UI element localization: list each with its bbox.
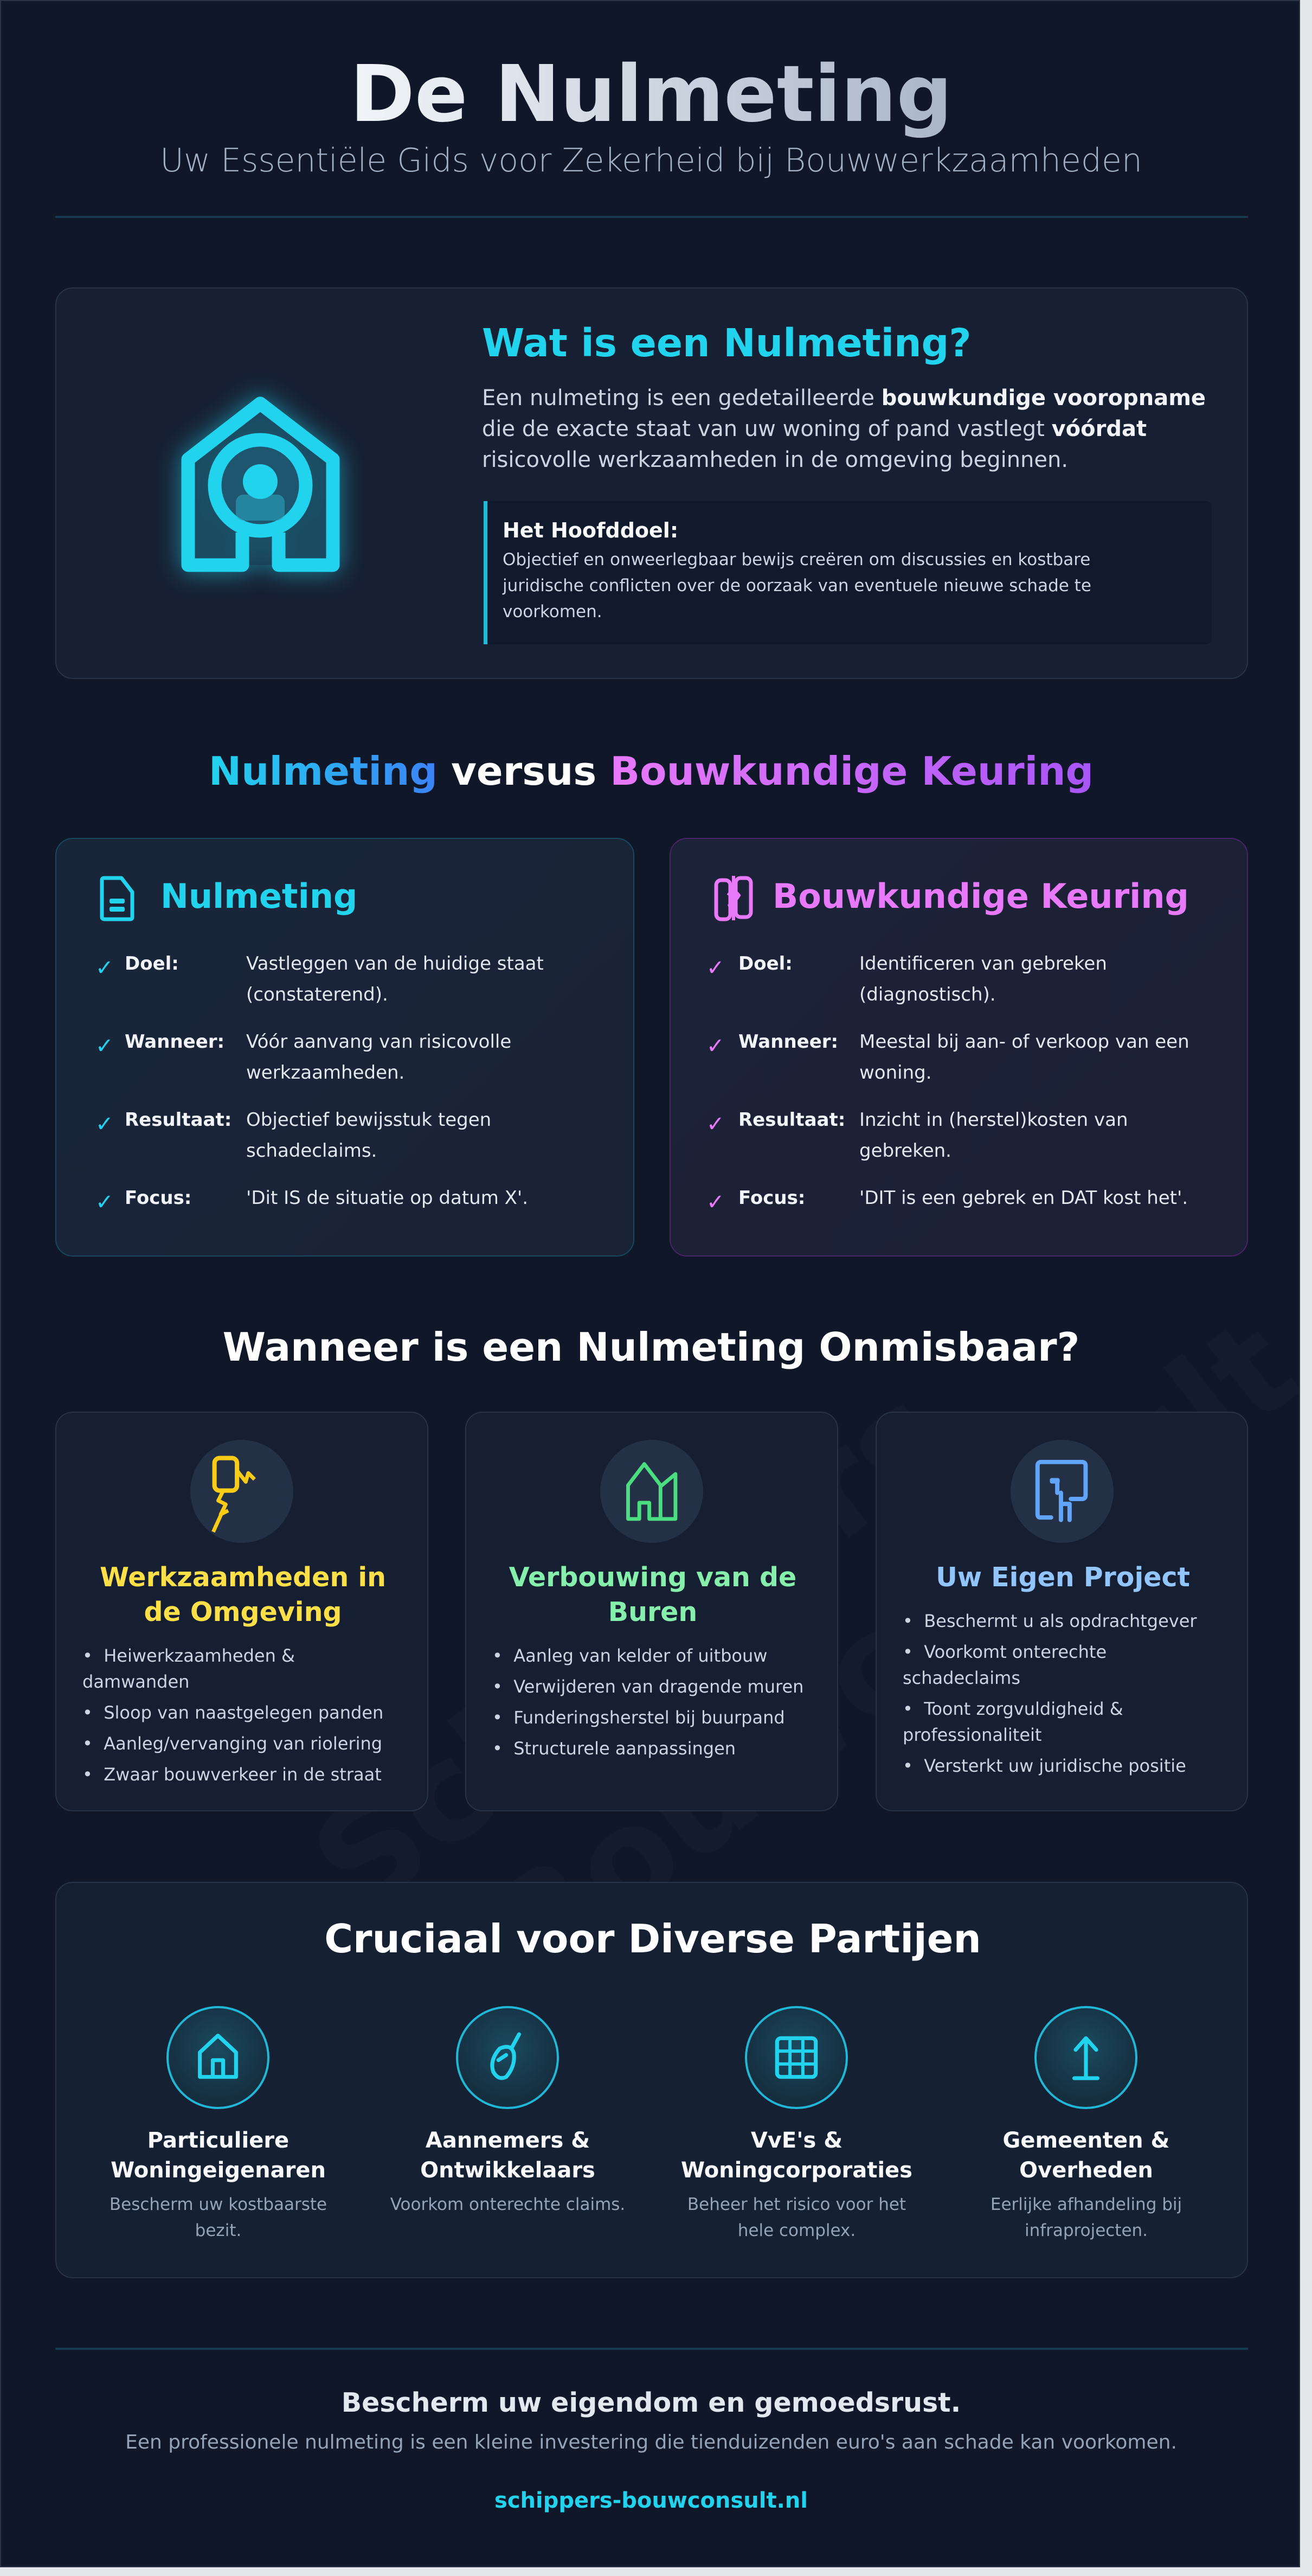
bullet list <box>82 1645 383 1785</box>
bullet list <box>492 1645 803 1759</box>
rows <box>95 953 544 1215</box>
party: gemeenten <box>991 2006 1182 2240</box>
party: aannemers: Ontwikkelaars <box>420 2158 595 2183</box>
title: De Nulmeting <box>350 48 953 139</box>
rows: ✓ <box>706 956 725 981</box>
bullet list: • Verwijderen van dragende muren <box>492 1676 803 1697</box>
rows: Wanneer: <box>125 1031 224 1053</box>
rows: Identificeren van gebreken <box>859 953 1107 975</box>
bullet list: • Funderingsherstel bij buurpand <box>492 1707 785 1728</box>
rows: Vóór aanvang van risicovolle <box>246 1031 511 1053</box>
party: vve <box>681 2006 912 2240</box>
party: particulieren: Particuliere <box>147 2128 289 2153</box>
party: aannemers <box>390 2006 625 2214</box>
rows: ✓ <box>706 1034 725 1059</box>
rows: woning. <box>859 1062 932 1084</box>
bullet list: • Sloop van naastgelegen panden <box>82 1702 383 1723</box>
heading: Cruciaal voor Diverse Partijen <box>324 1916 981 1962</box>
icon: houses <box>600 1440 703 1543</box>
icon: house with magnifier <box>165 385 356 588</box>
callout: hoofddoel: voorkomen. <box>503 602 602 621</box>
bullet list: • Aanleg van kelder of uitbouw <box>492 1645 767 1666</box>
party: vve: Beheer het risico voor het <box>687 2195 906 2214</box>
rows: (constaterend). <box>246 984 388 1005</box>
rows: Vastleggen van de huidige staat <box>246 953 544 975</box>
rows: Resultaat: <box>125 1109 231 1131</box>
rows: ✓ <box>95 956 114 981</box>
footer text: Een professionele nulmeting is een kleine investering die tienduizenden euro's aan schade kan voorkomen. <box>125 2431 1177 2453</box>
rows: 'Dit IS de situatie op datum X'. <box>246 1187 528 1209</box>
bullet list <box>903 1611 1197 1776</box>
panel: werkzaamheden in de omgeving <box>55 1412 428 1811</box>
rows: ✓ <box>95 1034 114 1059</box>
text block <box>482 386 1206 472</box>
heading: Nulmeting <box>160 876 357 916</box>
icon: blueprint <box>1011 1440 1114 1543</box>
rows: Doel: <box>125 953 179 975</box>
callout: hoofddoel: Objectief en onweerlegbaar bewijs creëren om discussies en kostbare <box>503 550 1090 569</box>
bullet list: • Toont zorgvuldigheid & <box>903 1699 1123 1719</box>
bullet list: • Versterkt uw juridische positie <box>903 1755 1186 1776</box>
heading: versus: Nulmeting versus Bouwkundige Keuring <box>209 748 1094 794</box>
rows: ✓ <box>95 1112 114 1137</box>
panel: diverse partijen <box>55 1882 1248 2278</box>
title: de Omgeving <box>144 1597 342 1627</box>
title: Werkzaamheden in <box>100 1562 386 1593</box>
party: gemeenten: Gemeenten & <box>1003 2128 1169 2153</box>
rows: ✓ <box>706 1112 725 1137</box>
rows: Focus: <box>738 1187 805 1209</box>
title: Verbouwing van de <box>509 1562 796 1593</box>
party: gemeenten: infraprojecten. <box>1025 2221 1148 2240</box>
party: particulieren: Bescherm uw kostbaarste <box>110 2195 327 2214</box>
rows: Meestal bij aan- of verkoop van een <box>859 1031 1189 1053</box>
party: particulieren <box>110 2006 327 2240</box>
bullet list: • Heiwerkzaamheden & <box>82 1645 295 1666</box>
heading: onmisbaar: Wanneer is een Nulmeting Onmisbaar? <box>223 1324 1079 1370</box>
rows: Inzicht in (herstel)kosten van <box>859 1109 1128 1131</box>
rows: Focus: <box>125 1187 191 1209</box>
rows: Objectief bewijsstuk tegen <box>246 1109 491 1131</box>
party: gemeenten: Overheden <box>1019 2158 1153 2183</box>
icon: document <box>100 876 134 921</box>
rows: ✓ <box>95 1190 114 1215</box>
title: Uw Eigen Project <box>936 1562 1190 1593</box>
heading: Bouwkundige Keuring <box>773 876 1189 916</box>
icon: arrow up <box>1034 2006 1137 2109</box>
rows <box>706 953 1189 1215</box>
rows: Doel: <box>738 953 793 975</box>
rows: gebreken. <box>859 1140 951 1162</box>
party: particulieren: bezit. <box>195 2221 241 2240</box>
bullet list: • Beschermt u als opdrachtgever <box>903 1611 1197 1631</box>
rows: 'DIT is een gebrek en DAT kost het'. <box>859 1187 1188 1209</box>
footer heading: Bescherm uw eigendom en gemoedsrust. <box>342 2387 961 2418</box>
bullet list: • Structurele aanpassingen <box>492 1738 736 1759</box>
bullet list: professionaliteit <box>903 1725 1041 1745</box>
rows: (diagnostisch). <box>859 984 996 1005</box>
title <box>509 1562 796 1627</box>
title <box>100 1562 386 1627</box>
rows: werkzaamheden. <box>246 1062 404 1084</box>
title: Buren <box>608 1597 697 1627</box>
panel: bouwkundige keuring comparison <box>670 838 1248 1257</box>
icon: home <box>166 2006 269 2109</box>
party: vve: hele complex. <box>738 2221 856 2240</box>
panel: uw eigen project <box>876 1412 1248 1811</box>
party: vve: VvE's & <box>751 2128 842 2153</box>
icon: pile driver <box>190 1440 293 1543</box>
text block: risicovolle werkzaamheden in de omgeving beginnen. <box>482 447 1068 472</box>
party: gemeenten: Eerlijke afhandeling bij <box>991 2195 1182 2214</box>
panel: nulmeting comparison <box>55 838 634 1257</box>
icon: building grid <box>745 2006 848 2109</box>
callout: hoofddoel: Het Hoofddoel: <box>503 518 678 542</box>
party: particulieren: Woningeigenaren <box>111 2158 326 2183</box>
party: vve: Woningcorporaties <box>681 2158 912 2183</box>
icon: trowel <box>456 2006 559 2109</box>
rows: Resultaat: <box>738 1109 845 1131</box>
rows: ✓ <box>706 1190 725 1215</box>
bullet list: • Voorkomt onterechte <box>903 1642 1107 1662</box>
bullet list: • Zwaar bouwverkeer in de straat <box>82 1764 382 1785</box>
text block: Een nulmeting is een gedetailleerde bouwkundige vooropname <box>482 386 1206 411</box>
party: aannemers: Aannemers & <box>426 2128 590 2153</box>
panel: verbouwing van de buren <box>465 1412 838 1811</box>
bullet list: damwanden <box>82 1671 189 1692</box>
callout: hoofddoel: juridische conflicten over de oorzaak van eventuele nieuwe schade te <box>503 576 1091 595</box>
party: aannemers: Voorkom onterechte claims. <box>390 2195 625 2214</box>
panel: wat is een nulmeting <box>55 287 1248 679</box>
bullet list: • Aanleg/vervanging van riolering <box>82 1733 382 1754</box>
text block: die de exacte staat van uw woning of pand vastlegt vóórdat <box>482 416 1147 441</box>
rows: schadeclaims. <box>246 1140 377 1162</box>
heading: Wat is een Nulmeting? <box>482 321 972 366</box>
icon: link <box>715 876 753 921</box>
rows: Wanneer: <box>738 1031 838 1053</box>
watermark <box>283 816 1312 2074</box>
footer url: schippers-bouwconsult.nl <box>494 2488 808 2513</box>
bullet list: schadeclaims <box>903 1668 1020 1688</box>
callout: hoofddoel <box>484 501 1212 644</box>
subtitle: Uw Essentiële Gids voor Zekerheid bij Bouwwerkzaamheden <box>160 142 1142 180</box>
